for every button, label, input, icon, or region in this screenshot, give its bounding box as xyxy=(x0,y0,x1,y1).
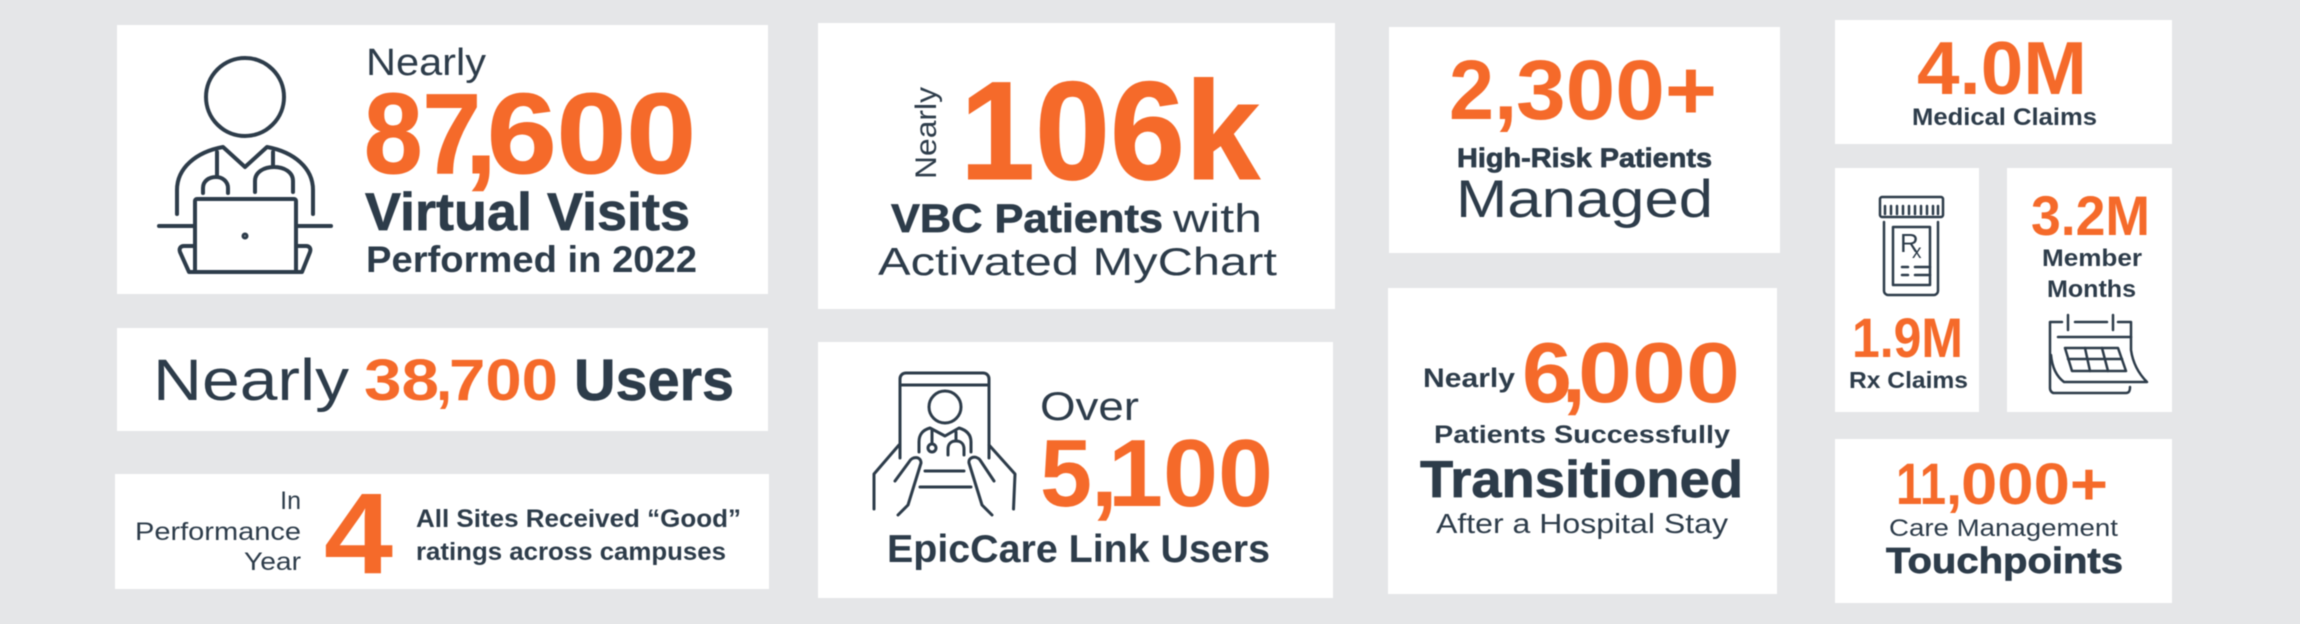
icon: doctor at laptop xyxy=(159,58,331,272)
number: 4: 4 xyxy=(324,470,393,598)
number: 87,600 xyxy=(364,71,696,198)
icon: prescription bottle xyxy=(1880,197,1943,295)
panel: transitioned patients xyxy=(1388,288,1777,594)
number: 87,600: 87 xyxy=(364,71,481,198)
number: 6,000: 000 xyxy=(1578,326,1740,421)
panel: high-risk patients xyxy=(1389,27,1780,253)
number: 1.9M: 1.9M xyxy=(1852,306,1963,369)
panel: Rx claims xyxy=(1835,168,1979,412)
text: In Performance Year: Performance xyxy=(135,518,301,546)
number: 2,300+: , xyxy=(1494,43,1517,137)
text: Patients Successfully: Patients Successfully xyxy=(1434,421,1730,449)
text: In Performance Year: Year xyxy=(244,548,301,576)
number: 5,100: 100 xyxy=(1108,420,1273,527)
panel: EpicCare Link users xyxy=(818,342,1333,598)
number: 87,600: 600 xyxy=(487,71,696,198)
text: In Performance Year: In xyxy=(280,487,301,515)
text: Over: Over xyxy=(1040,385,1139,429)
number: 38,700: , xyxy=(436,348,452,413)
icon: calendar xyxy=(2050,315,2147,393)
number: 11,000+: 11 xyxy=(1896,452,1946,517)
text: with: with xyxy=(1172,197,1262,241)
panel: virtual visits xyxy=(117,25,768,294)
text: EpicCare Link Users: EpicCare Link Users xyxy=(887,528,1270,571)
text: Nearly: Nearly xyxy=(153,348,349,413)
icon: hands holding tablet with doctor xyxy=(874,373,1015,515)
text: rotated Nearly: Nearly xyxy=(910,87,943,179)
text: In Performance Year xyxy=(135,487,301,576)
number: 5,100 xyxy=(1040,420,1273,527)
text: Member: Member xyxy=(2042,245,2142,272)
panel: users xyxy=(117,328,768,431)
panel: care management touchpoints xyxy=(1835,439,2172,603)
number: 2,300+: 300+ xyxy=(1516,43,1717,137)
number: 11,000+: , xyxy=(1946,452,1962,517)
text: Users: Users xyxy=(574,348,734,413)
number: 106k: 106k xyxy=(960,52,1260,209)
text: After a Hospital Stay: After a Hospital Stay xyxy=(1436,508,1728,539)
panel: VBC patients xyxy=(818,23,1335,309)
number: 4.0M: 4.0M xyxy=(1917,26,2087,110)
text: Touchpoints: Touchpoints xyxy=(1886,540,2123,581)
text: all sites received good: All Sites Received “Good” xyxy=(416,505,741,533)
text: Rx Claims: Rx Claims xyxy=(1849,367,1968,393)
icon: prescription bottle: x xyxy=(1912,242,1922,263)
text: VBC Patients: VBC Patients xyxy=(891,197,1163,241)
panel: performance year ratings xyxy=(115,470,769,598)
number: 3.2M: 3.2M xyxy=(2031,184,2150,247)
number: 6,000: 6 xyxy=(1522,326,1572,421)
number: 11,000+: 000+ xyxy=(1961,452,2108,517)
number: 11,000+ xyxy=(1896,452,2108,517)
number: 6,000: , xyxy=(1562,326,1586,421)
text: ratings across campuses: ratings across campuses xyxy=(416,538,726,566)
number: 87,600: , xyxy=(465,71,497,198)
text: Performed in 2022: Performed in 2022 xyxy=(366,239,697,280)
number: 38,700: 700 xyxy=(449,348,558,413)
text: High-Risk Patients: High-Risk Patients xyxy=(1457,143,1712,173)
text: Medical Claims: Medical Claims xyxy=(1912,104,2097,131)
text: Managed: Managed xyxy=(1456,170,1713,229)
panel: medical claims xyxy=(1835,20,2172,144)
number: 38,700 xyxy=(364,348,558,413)
text: Transitioned: Transitioned xyxy=(1420,451,1743,509)
text: Virtual Visits: Virtual Visits xyxy=(365,183,690,242)
number: 5,100: , xyxy=(1091,420,1118,527)
number: 6,000 xyxy=(1522,326,1740,421)
number: 2,300+: 2 xyxy=(1449,43,1494,137)
number: 38,700: 38 xyxy=(364,348,439,413)
panel: member months xyxy=(2007,168,2172,412)
number: 5,100: 5 xyxy=(1040,420,1092,527)
text: Care Management: Care Management xyxy=(1889,515,2118,542)
text: Months: Months xyxy=(2047,276,2136,303)
text: Activated MyChart: Activated MyChart xyxy=(878,241,1277,284)
text: Nearly: Nearly xyxy=(1423,363,1515,393)
text: Nearly: Nearly xyxy=(366,42,486,84)
icon: prescription bottle: R xyxy=(1900,228,1919,258)
